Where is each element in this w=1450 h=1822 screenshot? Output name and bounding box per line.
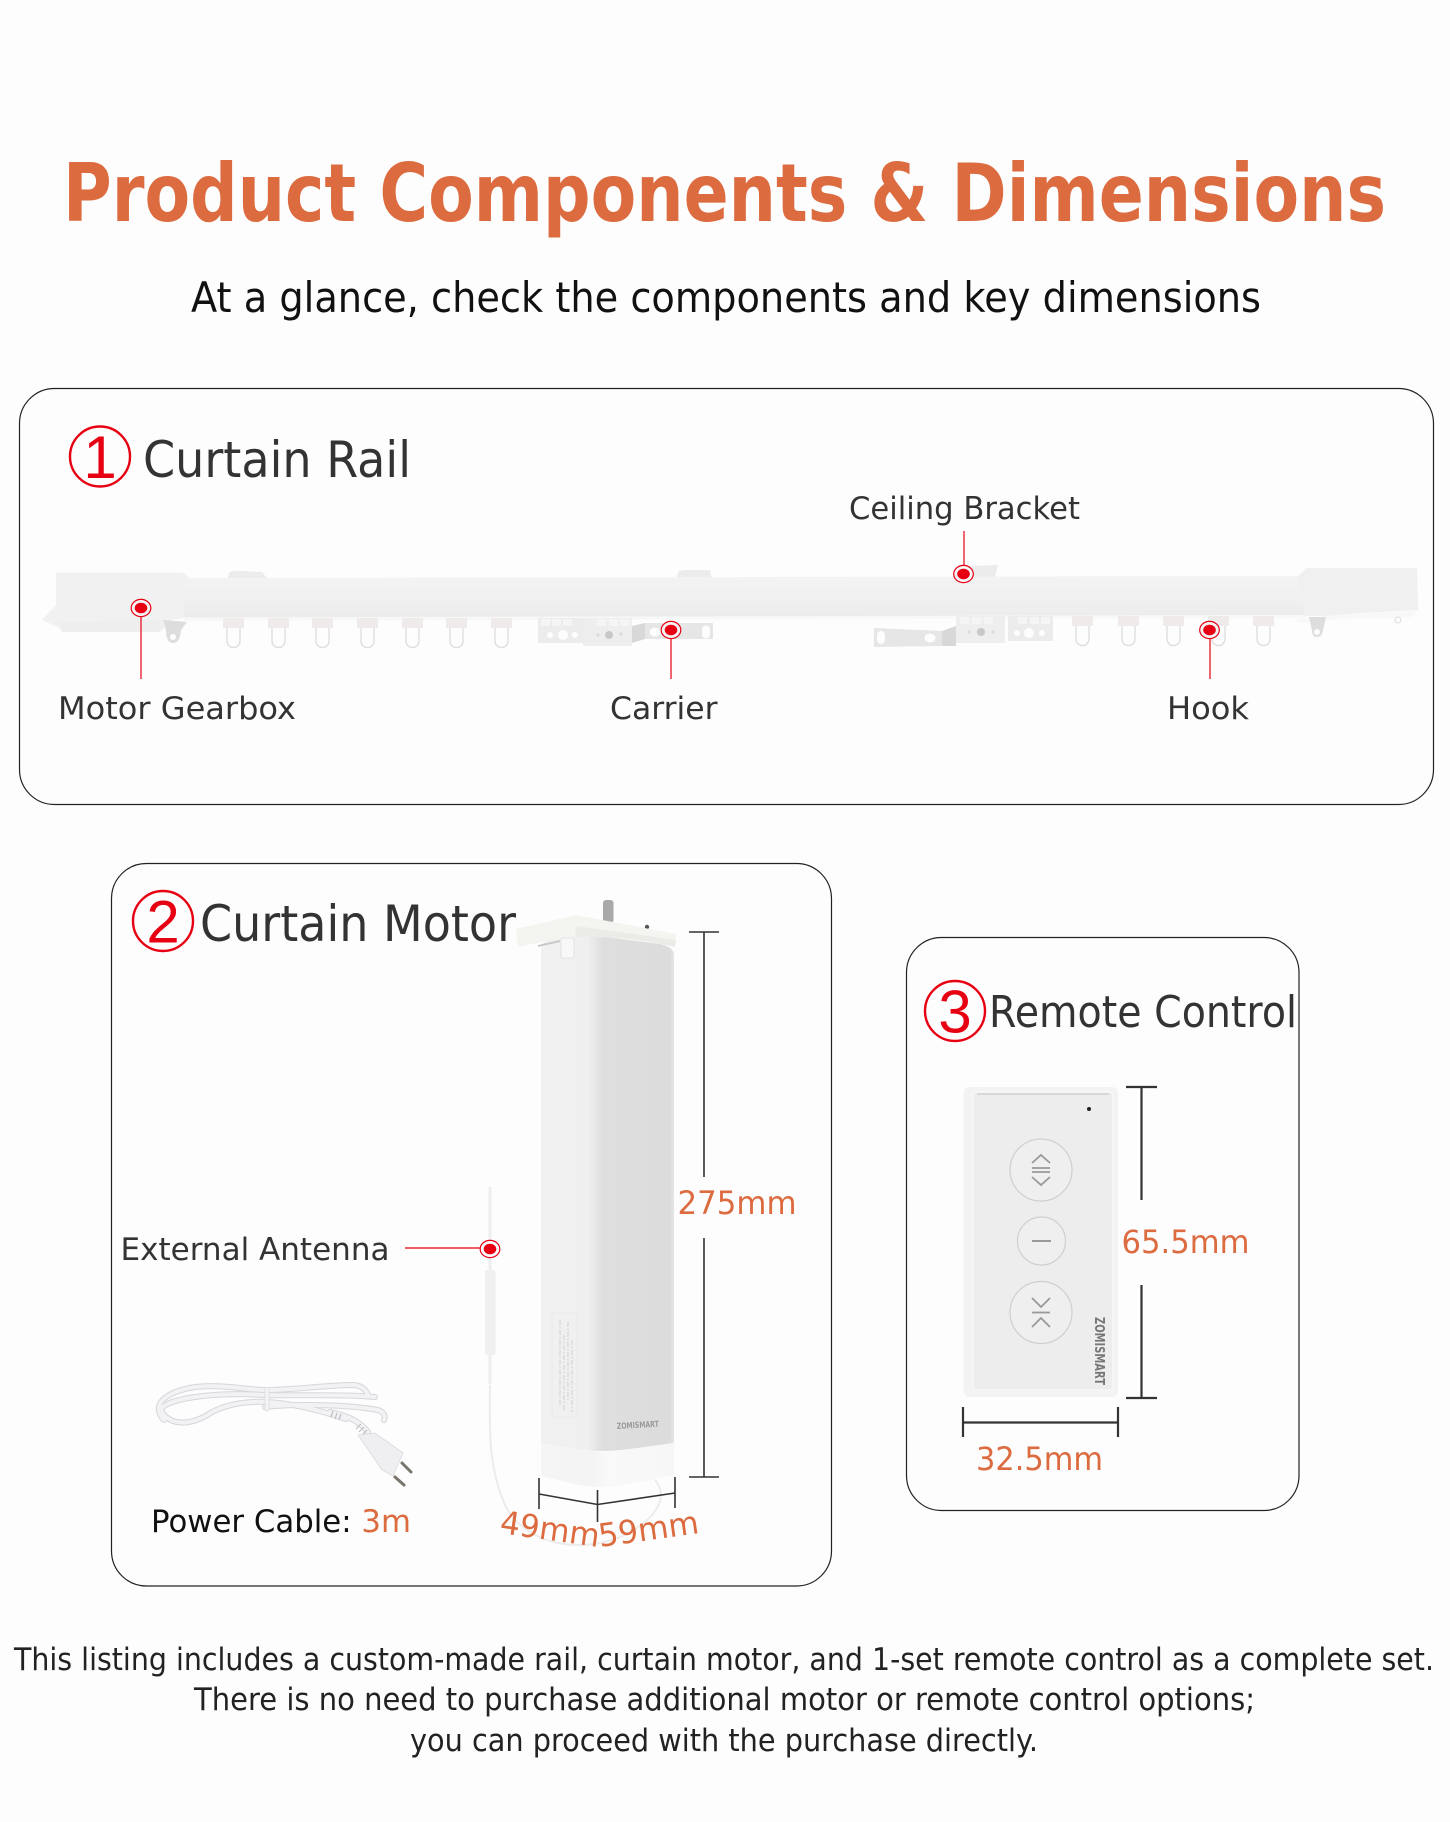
- callout: hook: [1167, 621, 1250, 727]
- right carrier and bracket: [874, 616, 1053, 647]
- footer note: you can proceed with the purchase directly.: [410, 1723, 1038, 1759]
- height dimension: 65.5mm: [1122, 1223, 1250, 1261]
- height dimension: [1122, 1087, 1250, 1398]
- plug: [358, 1433, 403, 1476]
- motor body: [541, 936, 674, 1451]
- callout: external antenna: External Antenna: [120, 1232, 390, 1268]
- callout: hook: Hook: [1167, 691, 1250, 727]
- cable tie: [265, 1387, 269, 1411]
- number badge 1: [70, 424, 130, 491]
- number badge 3: 3: [938, 978, 972, 1046]
- motor brand: ZOMISMART: [617, 1420, 659, 1432]
- right hooks: [1072, 616, 1274, 646]
- number badge 2: [133, 888, 193, 956]
- right end tab: [1395, 617, 1401, 623]
- heading: curtain rail: Curtain Rail: [143, 431, 411, 489]
- width dimension: 32.5mm: [976, 1440, 1103, 1478]
- panel: curtain rail: [20, 388, 1434, 804]
- right end cap: [1298, 568, 1418, 616]
- power cable illustration: [159, 1385, 411, 1485]
- cable coils: [159, 1385, 385, 1432]
- strain relief ribs: [331, 1411, 367, 1435]
- base dimension: 49mm: [498, 1503, 602, 1555]
- rail top clips: [228, 565, 998, 578]
- panel: curtain motor: [112, 864, 832, 1586]
- rail body: [184, 576, 1305, 618]
- callout: carrier: Carrier: [610, 691, 718, 727]
- shaft: [603, 900, 614, 923]
- close button: [1010, 1282, 1072, 1344]
- callout: motor gearbox: [58, 599, 296, 727]
- pin: [645, 925, 649, 929]
- motor cable: [490, 1385, 661, 1545]
- flange slot: [538, 940, 560, 947]
- callout: motor gearbox: Motor Gearbox: [58, 691, 296, 727]
- height dimension: [678, 932, 796, 1477]
- stop button: [1018, 1217, 1066, 1265]
- post: [561, 938, 574, 958]
- motor label: [552, 1313, 577, 1417]
- heading: curtain motor: Curtain Motor: [200, 895, 516, 953]
- number badge 3: [925, 978, 985, 1046]
- callout: carrier: [610, 621, 718, 727]
- power cable label: Power Cable: 3m: [151, 1504, 411, 1540]
- footer note: There is no need to purchase additional motor or remote control options;: [193, 1682, 1255, 1718]
- number badge 1: 1: [83, 424, 117, 491]
- callout: ceiling bracket: [849, 491, 1080, 583]
- antenna: [485, 1187, 496, 1384]
- base dimension: 59mm: [596, 1503, 701, 1555]
- footer note: [13, 1642, 1434, 1759]
- rail illustration: [42, 565, 1418, 648]
- base dimension: [498, 1477, 701, 1555]
- left hooks: [223, 618, 512, 648]
- remote brand: ZOMISMART: [1091, 1317, 1106, 1385]
- flange front: [575, 926, 676, 947]
- flange: [516, 915, 676, 947]
- panel: remote control: [906, 938, 1299, 1510]
- height dimension: 275mm: [678, 1184, 796, 1222]
- open button: [1010, 1139, 1072, 1201]
- right eyelet: [1309, 617, 1326, 637]
- heading: remote control: Remote Control: [989, 988, 1297, 1038]
- remote illustration: [964, 1087, 1118, 1397]
- gearbox end: [42, 572, 190, 632]
- number badge 2: 2: [146, 888, 180, 956]
- plug pins: [395, 1463, 411, 1485]
- left eyelet: [163, 620, 187, 643]
- subtitle: At a glance, check the components and key dimensions: [191, 273, 1261, 322]
- width dimension: [963, 1407, 1118, 1478]
- motor illustration: [490, 900, 676, 1545]
- left carrier and bracket: [538, 618, 713, 646]
- motor end cap: [541, 1443, 674, 1487]
- callout: ceiling bracket: Ceiling Bracket: [849, 491, 1080, 527]
